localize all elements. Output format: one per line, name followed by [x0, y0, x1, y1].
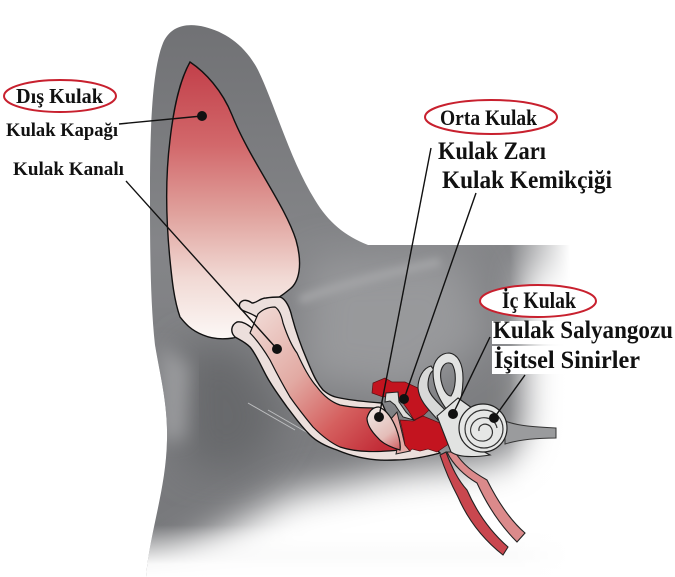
label: İç Kulak: İç Kulak: [502, 288, 576, 313]
label: Kulak Salyangozu: [448, 317, 675, 419]
pink wall between drum and cavity: [390, 412, 410, 454]
label: Kulak Kapağı: Kulak Kapağı: [6, 120, 118, 141]
vestibule: [437, 398, 490, 457]
middle ear: red cavity and ossicles: [372, 378, 450, 452]
cat ear and head silhouette: [146, 25, 566, 576]
cochlea: [459, 404, 507, 452]
ossicle: [385, 392, 414, 420]
label: Kulak Kemikçiği: [399, 167, 612, 404]
label: İç Kulak: [480, 285, 596, 317]
label: Kulak Kanalı: [13, 159, 282, 354]
label: Orta Kulak: Orta Kulak: [440, 105, 538, 130]
eardrum: [367, 407, 400, 450]
label: Kulak Kapağı: [6, 111, 207, 141]
eustachian tubes: [440, 452, 525, 555]
middle ear cavity: [400, 416, 450, 452]
label: Kulak Zarı: [374, 138, 546, 422]
canal outer wall: [232, 297, 440, 460]
canal inner tube: [250, 307, 400, 452]
label: Dış Kulak: Dış Kulak: [16, 84, 103, 108]
label: Kulak Kanalı: Kulak Kanalı: [13, 159, 124, 180]
label: İşitsel Sinirler: [489, 346, 642, 423]
auditory nerve: [505, 421, 556, 444]
inner ear: [418, 353, 556, 457]
label: İşitsel Sinirler: İşitsel Sinirler: [494, 346, 640, 374]
label: Kulak Zarı: Kulak Zarı: [438, 138, 546, 165]
left semicircular canal: [418, 366, 447, 420]
tube front: [447, 452, 525, 542]
label: Dış Kulak: [4, 80, 116, 112]
outer ear: pinna: [167, 62, 300, 339]
upper semicircular canal: [433, 353, 463, 410]
label: Orta Kulak: [425, 100, 557, 134]
tube back: [440, 452, 508, 555]
upper red bone: [372, 378, 431, 420]
label: Kulak Kemikçiği: Kulak Kemikçiği: [442, 167, 612, 194]
ear canal: [232, 297, 440, 460]
